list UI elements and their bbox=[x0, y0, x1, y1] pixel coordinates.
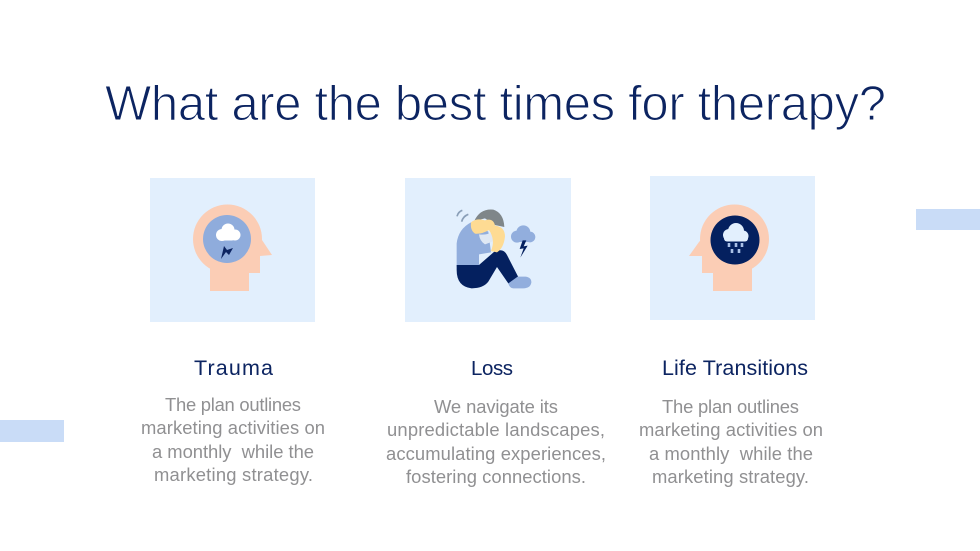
description: life transitions: a monthly while the bbox=[649, 443, 813, 464]
panel: loss bbox=[386, 178, 606, 487]
heading: loss: Loss bbox=[471, 357, 513, 380]
description: life transitions: marketing strategy. bbox=[652, 466, 809, 487]
decorative bar: right bbox=[916, 209, 980, 230]
title: What are the best times for therapy? bbox=[105, 77, 886, 131]
description: trauma: marketing activities on bbox=[141, 417, 325, 438]
heading: life transitions: Life Transitions bbox=[662, 356, 808, 380]
icon tile: loss bbox=[405, 178, 571, 322]
panel: life transitions bbox=[639, 176, 823, 487]
description: life transitions bbox=[639, 396, 823, 487]
icon tile: life transitions bbox=[650, 176, 815, 320]
panel: trauma bbox=[141, 178, 325, 485]
description: loss: fostering connections. bbox=[406, 466, 586, 487]
icon tile: trauma bbox=[150, 178, 315, 322]
icon: head with storm cloud bbox=[193, 204, 272, 291]
description: loss: We navigate its bbox=[434, 396, 558, 417]
description: trauma: a monthly while the bbox=[152, 441, 314, 462]
description: trauma: marketing strategy. bbox=[154, 464, 313, 485]
decorative bar: left bbox=[0, 420, 64, 442]
icon: head with rain cloud bbox=[689, 204, 769, 291]
description: trauma: The plan outlines bbox=[165, 394, 301, 415]
description: trauma bbox=[141, 394, 325, 485]
description: loss bbox=[386, 396, 606, 487]
heading: trauma: Trauma bbox=[194, 356, 273, 380]
description: loss: accumulating experiences, bbox=[386, 443, 606, 464]
description: life transitions: The plan outlines bbox=[662, 396, 799, 417]
description: life transitions: marketing activities on bbox=[639, 419, 823, 440]
description: loss: unpredictable landscapes, bbox=[387, 419, 605, 440]
icon: distressed seated person bbox=[457, 210, 535, 288]
